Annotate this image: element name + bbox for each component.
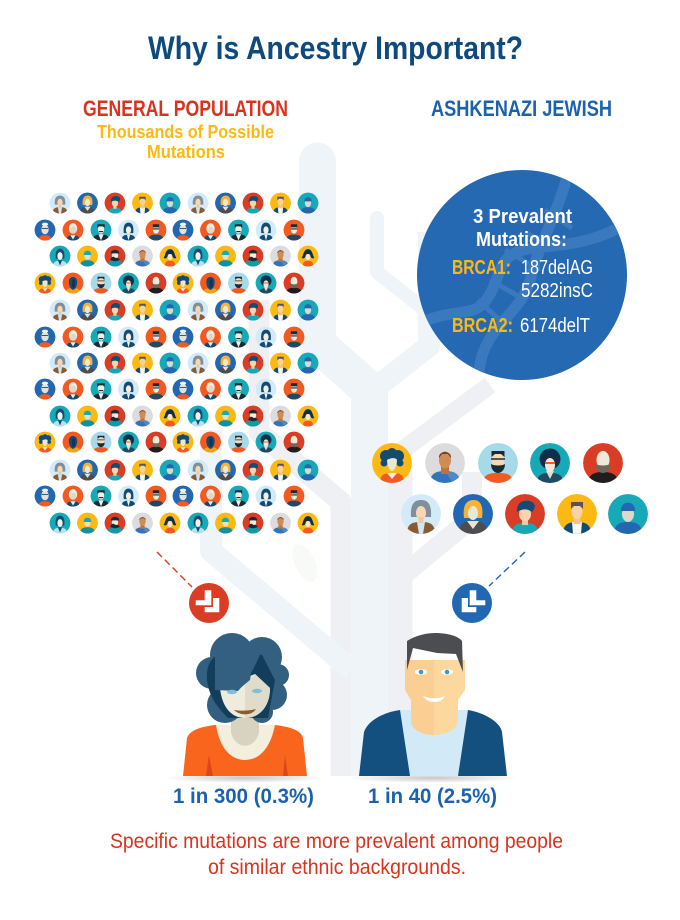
footer text: of similar ethnic backgrounds.	[208, 855, 466, 879]
heading: general population	[83, 96, 288, 162]
dashed connector: red	[157, 552, 192, 587]
icon: blue arrow badge	[452, 583, 492, 623]
panel: prevalent mutations circle: BRCA2:	[452, 315, 513, 337]
stat: ashkenazi jewish: 1 in 40 (2.5%)	[368, 785, 497, 808]
panel: prevalent mutations circle: 5282insC	[521, 280, 593, 302]
heading: general population: Mutations	[147, 142, 225, 162]
title: Why is Ancestry Important?	[148, 30, 523, 66]
footer text	[110, 829, 563, 879]
panel: prevalent mutations circle: 6174delT	[520, 315, 590, 337]
footer text: Specific mutations are more prevalent among people	[110, 829, 563, 853]
stat: general population: 1 in 300 (0.3%)	[173, 785, 314, 808]
panel: prevalent mutations circle: Mutations:	[476, 229, 567, 251]
icon: red arrow badge	[189, 583, 229, 623]
figure: woman	[165, 633, 325, 783]
panel: prevalent mutations circle: BRCA1:	[452, 257, 511, 279]
heading: general population: Thousands of Possible	[97, 122, 274, 142]
avatar group: ashkenazi jewish	[372, 443, 648, 534]
avatar grid: general population	[34, 192, 318, 534]
dashed connector: blue	[489, 552, 525, 586]
panel: prevalent mutations circle: 187delAG	[521, 257, 593, 279]
background tree	[211, 142, 490, 776]
heading: ashkenazi jewish: ASHKENAZI JEWISH	[431, 96, 612, 121]
panel: prevalent mutations circle: 3 Prevalent	[473, 206, 572, 228]
panel: prevalent mutations circle	[417, 170, 627, 380]
figure: man	[347, 633, 519, 783]
heading: general population: GENERAL POPULATION	[83, 96, 288, 121]
